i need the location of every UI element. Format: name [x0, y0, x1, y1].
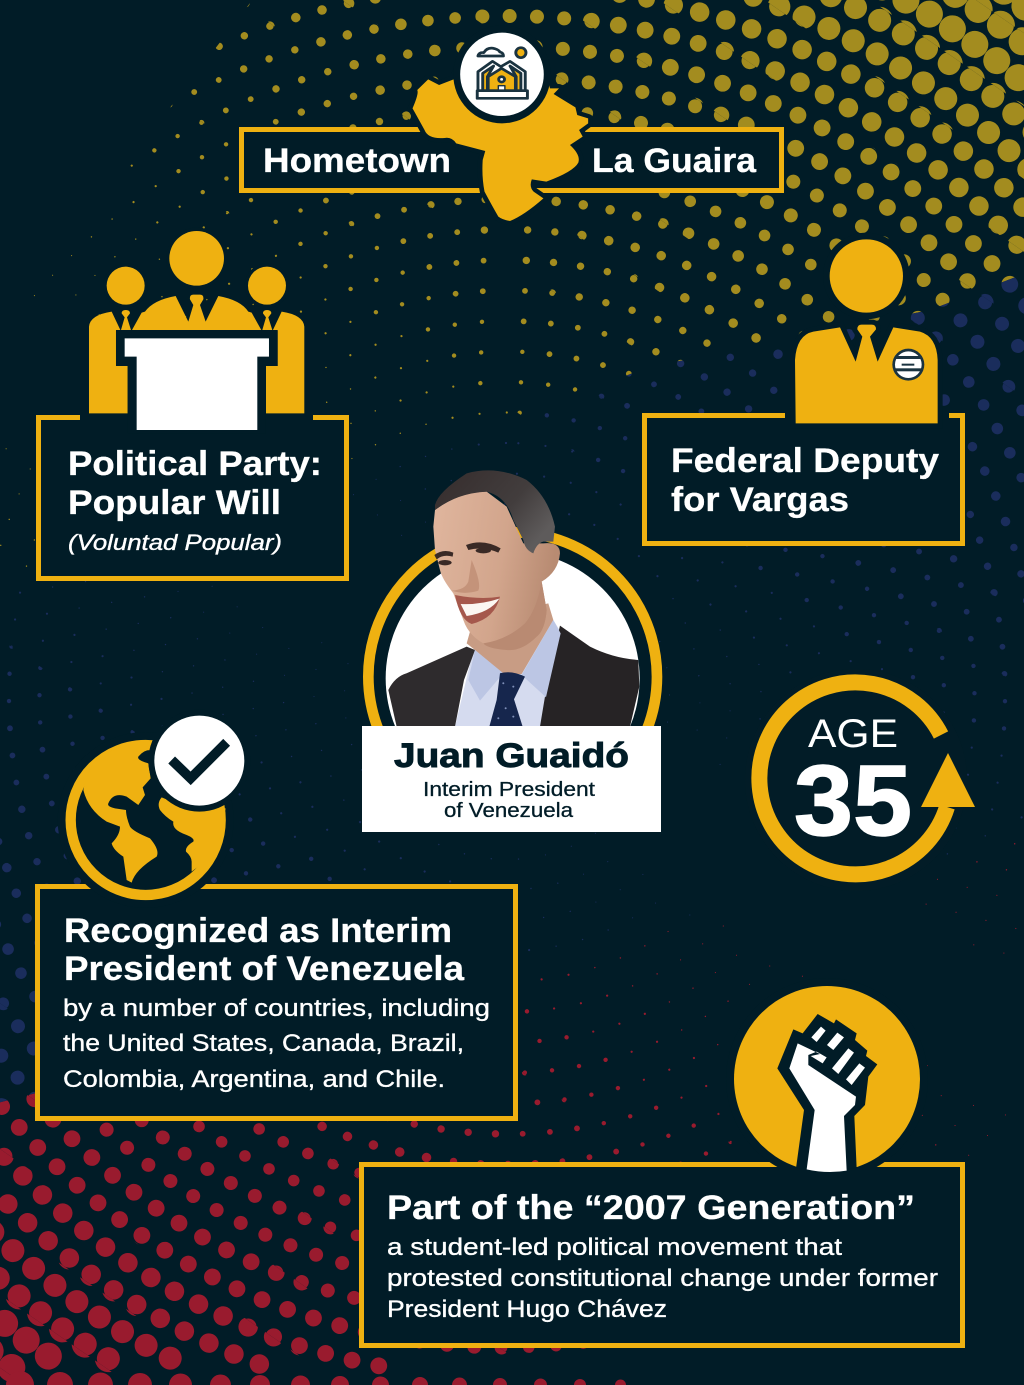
heading: for Vargas: for Vargas	[671, 481, 849, 519]
name: Juan Guaidó: Juan Guaidó	[394, 737, 629, 775]
globe halo	[58, 732, 234, 908]
house badge circle	[453, 25, 551, 123]
heading: Political Party: Political Party:	[68, 445, 322, 483]
jacket right	[540, 626, 639, 727]
side officials	[89, 312, 128, 413]
collar	[468, 620, 561, 701]
check mark	[172, 742, 227, 778]
body line 2: the United States, Canada, Brazil,	[63, 1030, 464, 1057]
role line 2: of Venezuela	[444, 800, 574, 822]
label: AGE: AGE	[808, 712, 898, 756]
body line 3: Colombia, Argentina, and Chile.	[63, 1066, 445, 1093]
label: Hometown: Hometown	[263, 142, 451, 180]
icon: age circle arrow	[745, 669, 975, 891]
fist outline	[777, 1014, 877, 1168]
neck	[467, 603, 553, 674]
heading line 1: Recognized as Interim	[64, 912, 452, 950]
heading: Part of the “2007 Generation”	[387, 1189, 915, 1227]
icon: Venezuela map with house badge	[413, 25, 588, 221]
panel: name card	[362, 726, 661, 832]
number: 35: 35	[794, 745, 912, 857]
gold ring	[368, 532, 657, 821]
brows and eyes	[434, 542, 501, 559]
icon: deputy figure	[795, 239, 938, 423]
heading: Popular Will: Popular Will	[68, 484, 281, 522]
icon: globe with check mark	[58, 710, 250, 908]
panel: hometown	[242, 130, 782, 190]
label: La Guaira: La Guaira	[592, 142, 757, 180]
jacket left	[388, 647, 475, 727]
role line 1: Interim President	[423, 779, 596, 801]
head	[830, 239, 903, 313]
panel: 2007 generation	[362, 1164, 962, 1346]
body with tie	[795, 325, 938, 423]
check badge	[148, 710, 250, 812]
body line 3: President Hugo Chávez	[387, 1296, 667, 1323]
mouth and teeth	[455, 595, 500, 624]
body line 2: protested constitutional change under former	[387, 1265, 938, 1292]
body line 1: a student-led political movement that	[387, 1234, 842, 1261]
center official	[107, 231, 286, 305]
panel: political party	[38, 410, 346, 578]
heading: Federal Deputy: Federal Deputy	[671, 442, 939, 480]
subtext: Voluntad Popular: (Voluntad Popular)	[68, 530, 282, 555]
panel: federal deputy	[644, 408, 962, 544]
land west	[83, 742, 157, 883]
house icon	[477, 48, 527, 98]
hair	[435, 470, 555, 553]
lapel pin	[892, 349, 924, 381]
jaw shadow	[483, 582, 547, 650]
face	[433, 492, 560, 650]
tie	[489, 672, 525, 727]
gold disc	[728, 986, 928, 1167]
icon: three officials at podium	[89, 231, 304, 433]
land east	[159, 797, 226, 872]
hand	[789, 1043, 856, 1172]
podium	[116, 330, 278, 433]
nose shadow	[452, 560, 479, 593]
shirt	[455, 620, 562, 727]
map of Venezuela	[413, 60, 588, 221]
icon: raised fist	[726, 978, 928, 1180]
white disc	[386, 551, 640, 805]
heading line 2: President of Venezuela	[64, 950, 465, 988]
body line 1: by a number of countries, including	[63, 995, 490, 1022]
fingers	[811, 1027, 865, 1085]
panel: recognized as interim president	[38, 886, 516, 1118]
globe ring	[71, 745, 221, 895]
portrait: Juan Guaidó	[368, 470, 657, 821]
